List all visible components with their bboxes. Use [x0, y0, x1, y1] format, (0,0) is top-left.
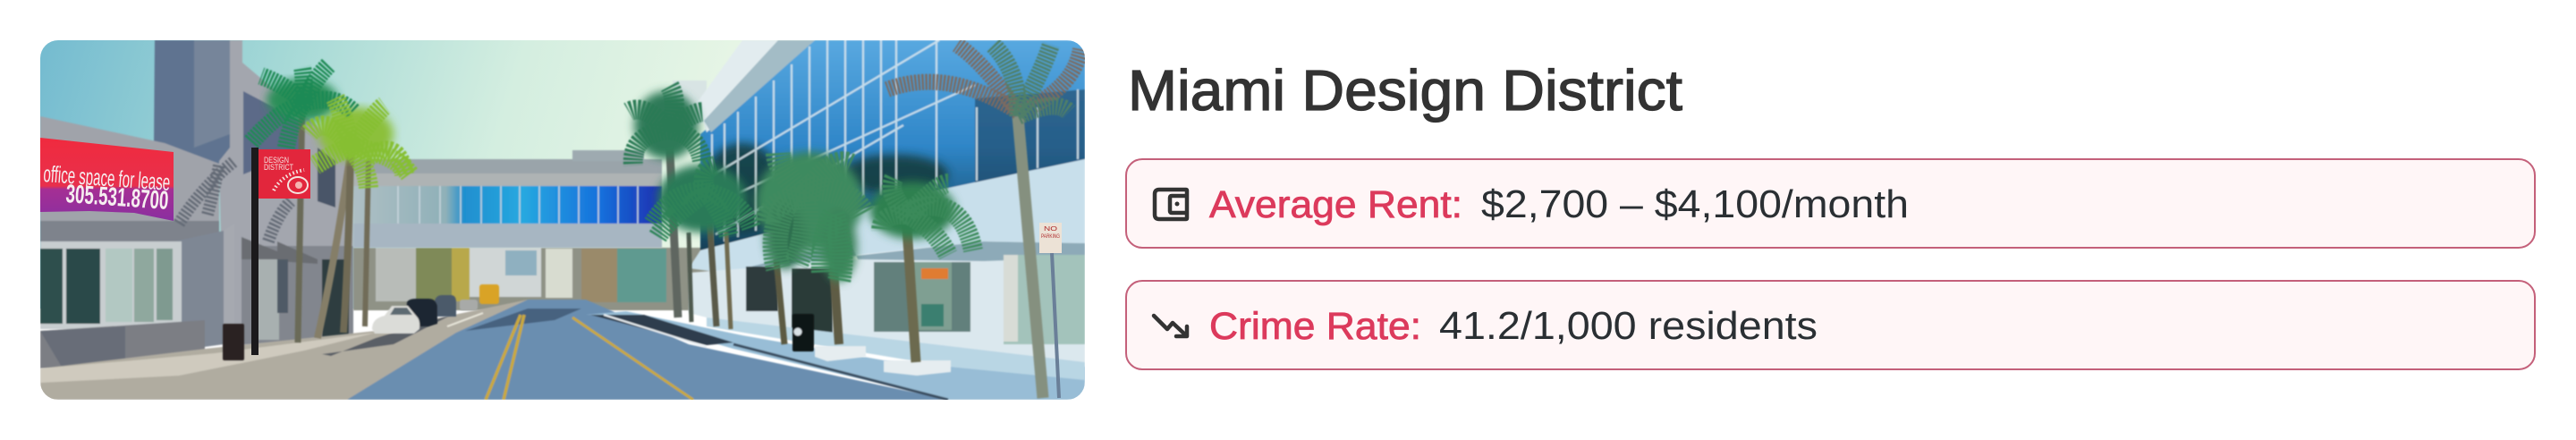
palms, right group	[629, 45, 1080, 398]
value: rent range: $2,700 – $4,100/month	[1481, 182, 1909, 226]
title: Miami Design District	[1128, 58, 1682, 123]
tower	[154, 40, 230, 170]
banner: office space for lease	[43, 160, 171, 196]
photo: Miami Design District street	[40, 40, 1085, 400]
distant street buildings	[353, 248, 711, 310]
left gray building	[40, 40, 353, 368]
crown masses	[634, 91, 955, 282]
panel: average rent	[1126, 159, 2535, 248]
ground floor	[689, 258, 1085, 371]
banner: 305.531.8700	[65, 180, 169, 216]
parked cars	[372, 284, 499, 334]
lower wall	[181, 231, 224, 348]
value: crime rate: 41.2/1,000 residents	[1439, 304, 1818, 348]
icon: wallet	[1155, 190, 1187, 219]
shadow below band	[40, 220, 220, 242]
palms, left group	[250, 64, 410, 343]
canopy	[689, 159, 1085, 275]
panel: crime rate	[1126, 281, 2535, 369]
banner	[40, 138, 174, 221]
right glass building	[689, 40, 1085, 380]
roof	[40, 116, 219, 231]
sign: Design District: DESIGN	[264, 156, 289, 165]
window	[40, 241, 182, 329]
sign: Design District	[251, 148, 310, 355]
sign: Design District: DISTRICT	[264, 163, 293, 172]
glass mullions	[707, 40, 1078, 246]
glass reflections	[702, 143, 948, 233]
sky	[40, 40, 845, 309]
planter wall	[40, 320, 205, 368]
storefronts	[242, 246, 353, 344]
palm shadows	[179, 161, 291, 241]
sign: No Parking	[1039, 223, 1062, 398]
planters and bins	[223, 314, 951, 376]
label: average rent: Average Rent:	[1209, 183, 1462, 226]
sign: No Parking: NO	[1044, 226, 1058, 233]
icon: trending down	[1154, 316, 1187, 336]
label: crime rate: Crime Rate:	[1209, 305, 1421, 348]
ground and road	[40, 300, 1085, 400]
lane lines	[486, 315, 521, 400]
sign: No Parking: PARKING	[1041, 234, 1060, 240]
skybridge	[353, 80, 707, 248]
